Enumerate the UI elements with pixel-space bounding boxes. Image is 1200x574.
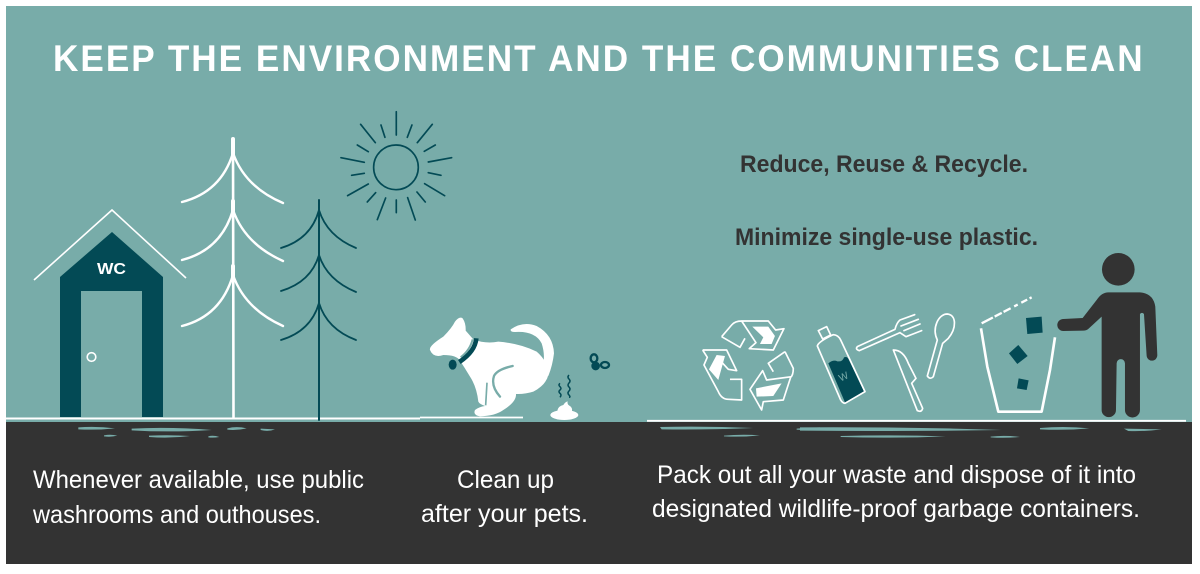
icon: recycling symbol bbox=[703, 321, 793, 410]
text: pack out waste bbox=[652, 461, 1140, 523]
text: pack out waste: designated wildlife-proof garbage containers. bbox=[652, 495, 1140, 523]
text: washrooms bbox=[32, 466, 364, 529]
panel: sky background bbox=[6, 6, 1192, 423]
icon: outhouse bbox=[34, 210, 186, 417]
icon: dog bbox=[430, 318, 554, 416]
icon: plastic fork bbox=[857, 315, 922, 351]
icon: outhouse: WC bbox=[97, 261, 126, 278]
text: pets bbox=[421, 466, 588, 528]
text: pets: Clean up bbox=[457, 466, 554, 494]
title: KEEP THE ENVIRONMENT AND THE COMMUNITIES CLEAN bbox=[53, 37, 1143, 79]
panel: ground bbox=[6, 422, 1192, 564]
text: pack out waste: Pack out all your waste and dispose of it into bbox=[657, 461, 1136, 489]
icon: person bbox=[1057, 253, 1157, 417]
icon: fly bbox=[591, 354, 609, 370]
text: reduce reuse recycle: Reduce, Reuse & Recycle. bbox=[740, 151, 1028, 178]
icon: garbage bin with waste bbox=[981, 297, 1055, 412]
ground lines and puddles bbox=[6, 418, 1186, 438]
icon: plastic knife bbox=[893, 350, 923, 411]
icon: plastic spoon bbox=[927, 314, 954, 378]
icon: plastic bottle bbox=[817, 327, 865, 403]
icon: dog waste with odor bbox=[550, 375, 578, 420]
icon: sun bbox=[341, 112, 452, 220]
text: washrooms: Whenever available, use public bbox=[33, 466, 364, 494]
icon: white pine tree bbox=[182, 139, 283, 417]
icon: dark pine tree bbox=[281, 200, 356, 420]
text: washrooms: washrooms and outhouses. bbox=[32, 501, 321, 529]
text: pets: after your pets. bbox=[421, 500, 588, 528]
icon: plastic bottle: W bbox=[837, 370, 851, 384]
text: minimize plastic: Minimize single-use plastic. bbox=[735, 224, 1038, 251]
